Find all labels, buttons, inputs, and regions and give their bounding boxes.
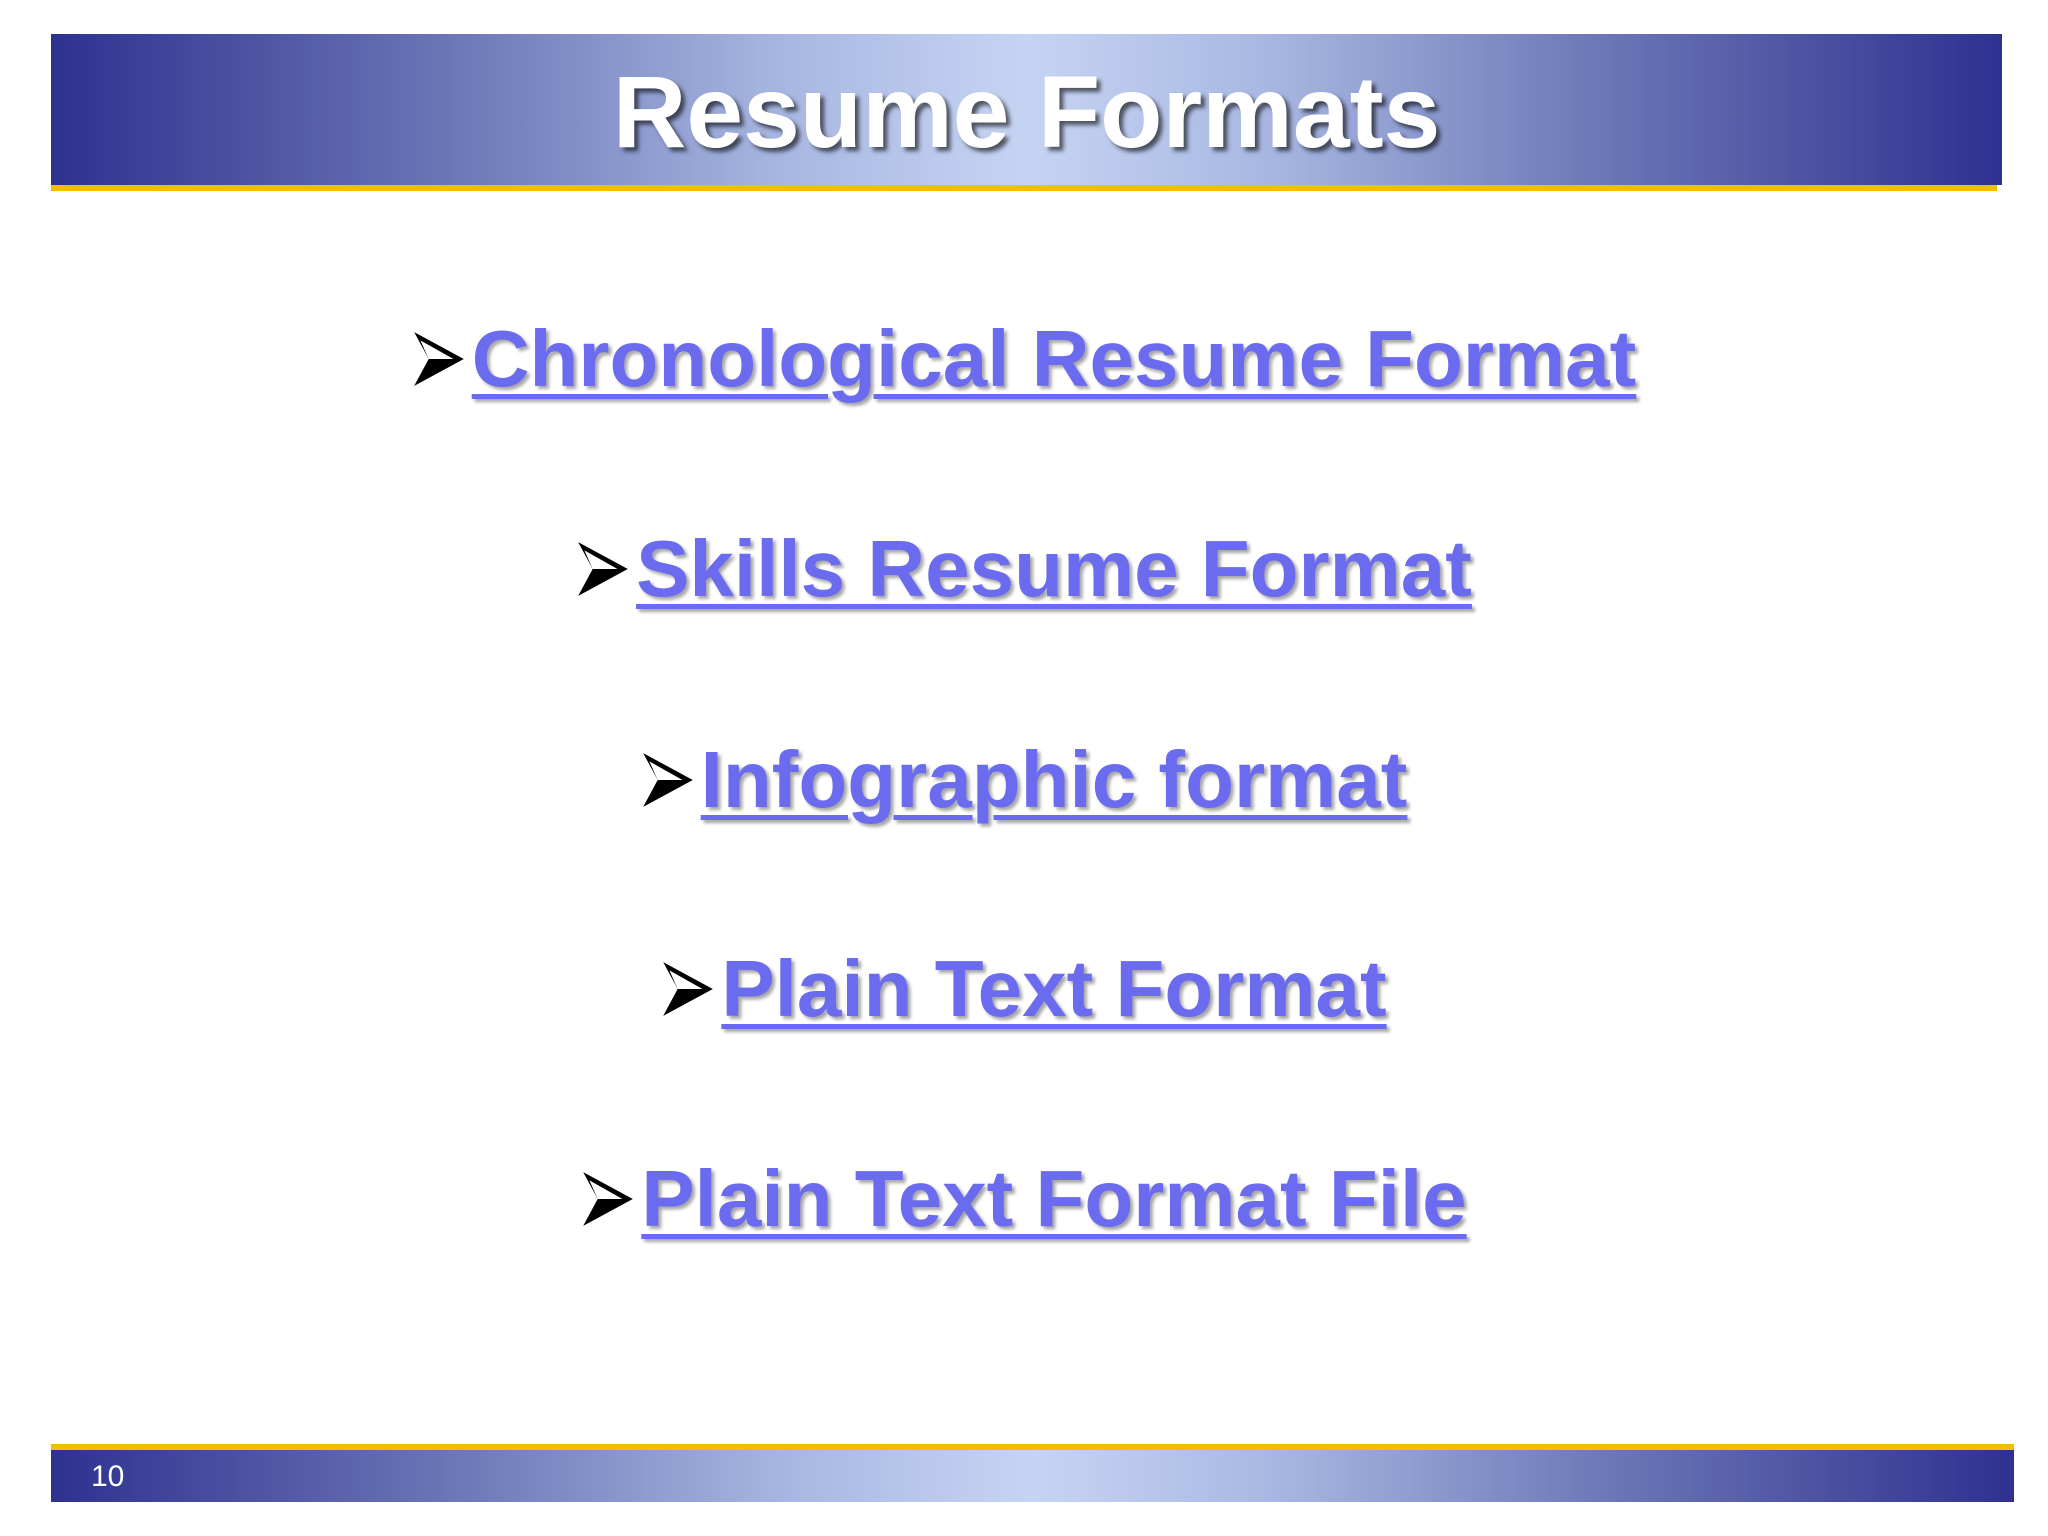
footer yellow line bbox=[51, 1444, 2014, 1450]
item: plain text: Plain Text Format bbox=[721, 944, 1387, 1033]
item: chronological: Chronological Resume Format bbox=[472, 314, 1636, 403]
item: skills: Skills Resume Format bbox=[636, 524, 1472, 613]
page number: 10 bbox=[91, 1460, 124, 1493]
header band bbox=[51, 34, 2002, 185]
title: Resume Formats bbox=[613, 55, 1440, 169]
item: plain text file: Plain Text Format File bbox=[641, 1154, 1467, 1243]
item: infographic: Infographic format bbox=[701, 735, 1407, 824]
header yellow line bbox=[51, 185, 1997, 191]
footer band bbox=[51, 1450, 2014, 1502]
